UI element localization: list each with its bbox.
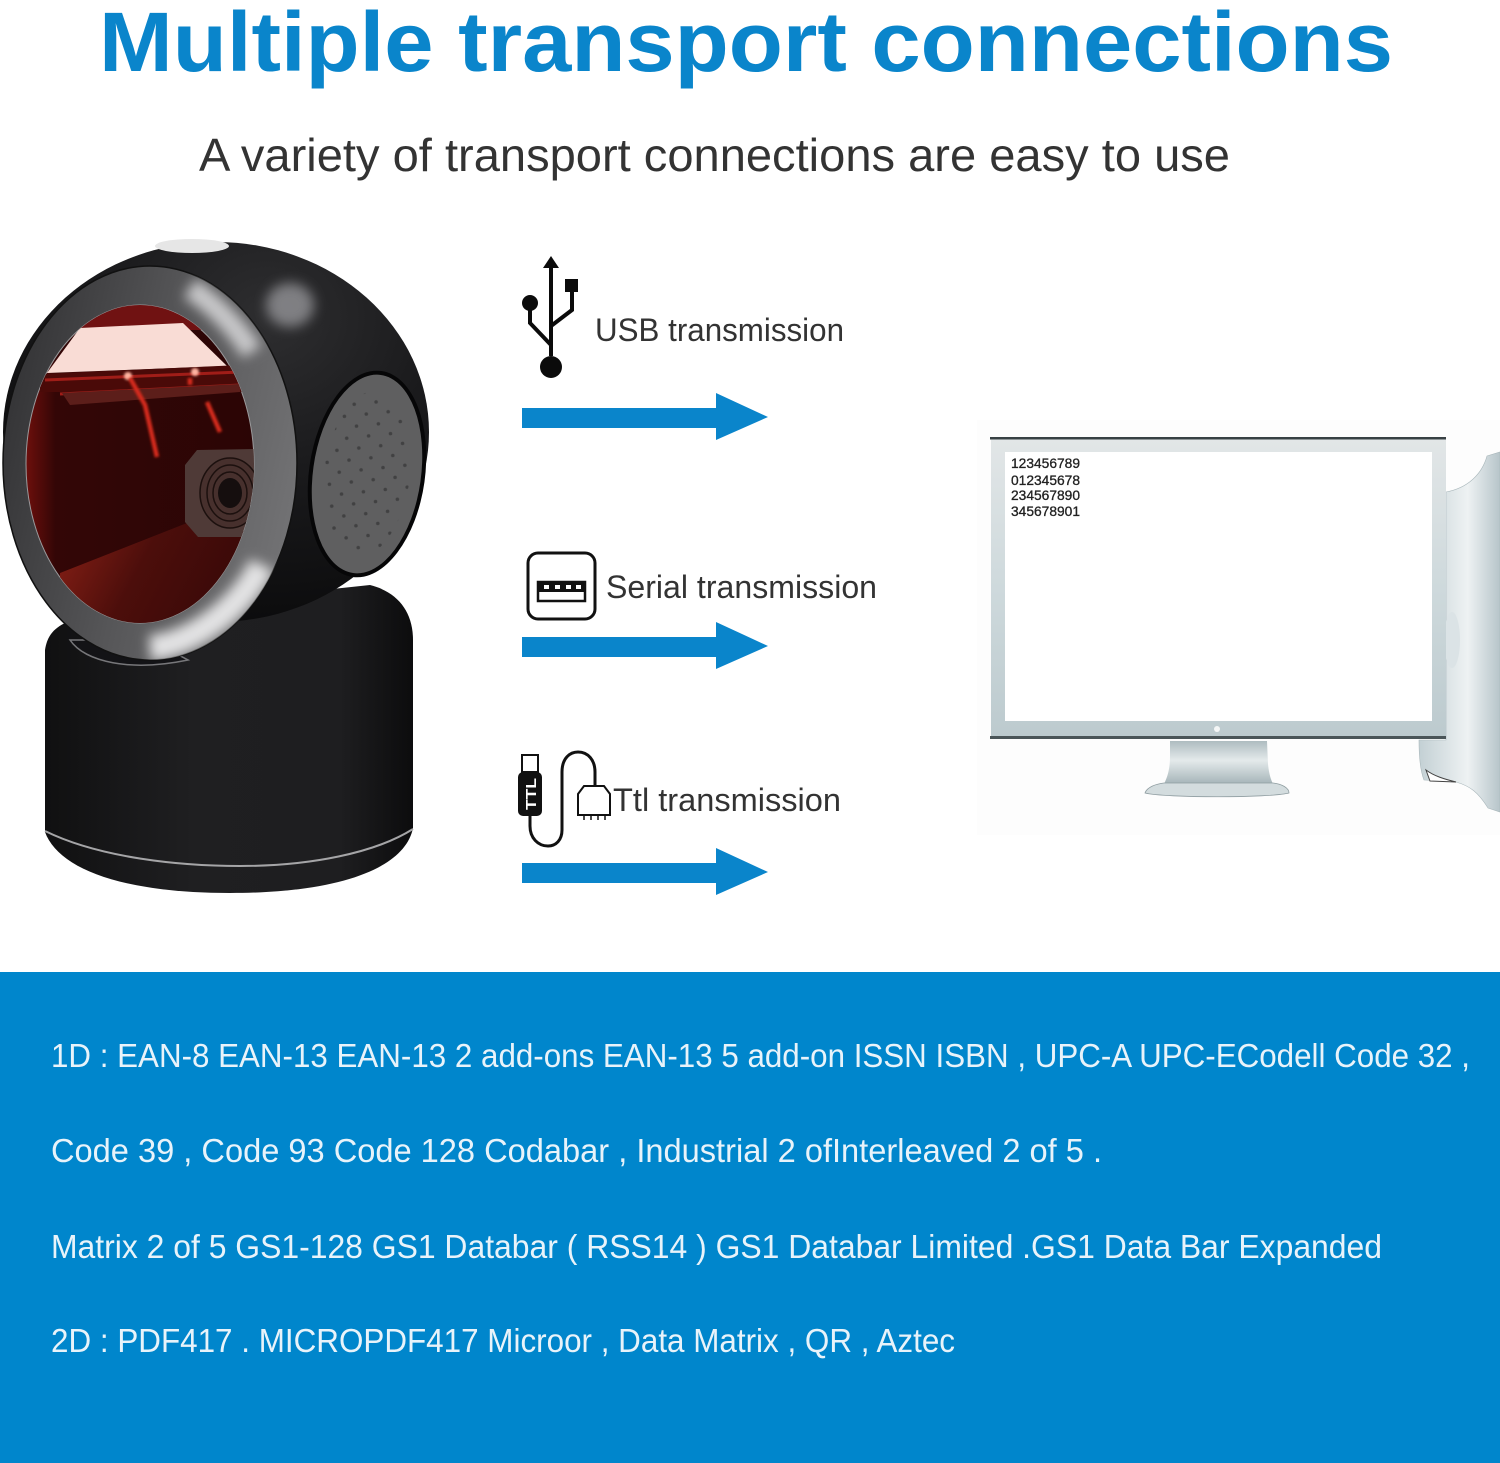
shelf: [62, 384, 240, 405]
2D codes line: 2D : PDF417 . MICROPDF417 Microor , Data Matrix , QR , Aztec: [51, 1322, 955, 1359]
laser flare 2: [191, 368, 199, 376]
serial port icon: [528, 553, 595, 619]
neck crescent: [70, 640, 188, 665]
top button: [155, 239, 229, 253]
sphere highlight: [266, 283, 314, 327]
tower foot: [1426, 770, 1456, 782]
subtitle: A variety of transport connections are easy to use: [199, 129, 1230, 181]
camera rings: [200, 458, 260, 528]
TTL label: Ttl transmission: [613, 782, 841, 818]
laser beam marks: [130, 378, 220, 457]
side pad recess: [295, 363, 439, 585]
scan window: [26, 300, 260, 630]
red laser lines: [45, 372, 240, 394]
screen numbers: 345678901: [1011, 504, 1080, 519]
scanner base: [45, 585, 413, 893]
monitor foot: [1145, 783, 1289, 797]
panel: supported barcodes: [0, 972, 1500, 1463]
side pad dots: [313, 385, 421, 563]
camera plate: [185, 449, 256, 537]
bezel top edge: [990, 437, 1446, 440]
screen numbers: 012345678: [1011, 473, 1080, 488]
1D codes line 2: Code 39 , Code 93 Code 128 Codabar , Industrial 2 ofInterleaved 2 of 5 .: [51, 1132, 1102, 1169]
laser flares: [124, 372, 132, 380]
side pad: [300, 367, 434, 581]
bright band: [47, 323, 227, 373]
window top red: [78, 305, 202, 330]
camera ring inner: [213, 472, 247, 514]
USB icon: [522, 256, 578, 378]
computer tower: [1419, 452, 1500, 812]
bezel bottom edge: [990, 736, 1446, 739]
barcode scanner illustration: [3, 239, 439, 893]
screen numbers: 123456789: [1011, 456, 1080, 471]
silver ring: [3, 266, 297, 660]
USB label: USB transmission: [595, 312, 844, 348]
window floor: [60, 524, 244, 623]
1D codes line 3: Matrix 2 of 5 GS1-128 GS1 Databar ( RSS14 ) GS1 Databar Limited .GS1 Data Bar Expanded: [51, 1228, 1382, 1265]
monitor screen: [1005, 452, 1432, 721]
faint image background: [977, 420, 1500, 835]
camera lens: [218, 478, 242, 508]
serial label: Serial transmission: [606, 569, 877, 605]
arrow: serial: [522, 622, 768, 669]
arrow: USB: [522, 393, 768, 440]
screen numbers: 234567890: [1011, 488, 1080, 503]
monitor stand: [1164, 741, 1273, 784]
dark band under the light: [40, 365, 250, 392]
TTL cable icon: [518, 752, 610, 846]
tower logo: [1444, 612, 1460, 668]
camera ring mid: [207, 465, 253, 521]
apple logo dot: [1214, 726, 1220, 732]
arrow: TTL: [522, 848, 768, 895]
scanner sphere: [3, 242, 429, 622]
computer illustration: [977, 420, 1500, 835]
TTL cable icon: TTL: [523, 778, 540, 810]
screen numbers: [1011, 456, 1080, 519]
base silver stripe: [45, 829, 413, 866]
monitor bezel: [991, 438, 1446, 739]
